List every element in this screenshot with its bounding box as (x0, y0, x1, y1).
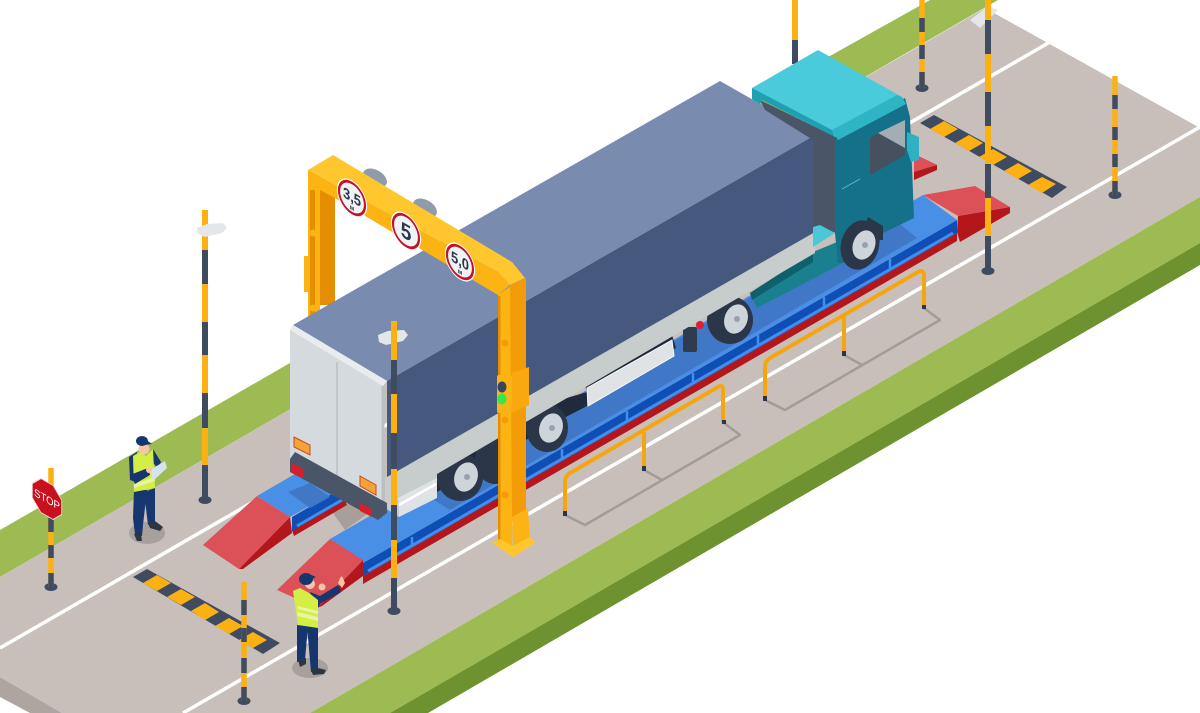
sign: height 3,5 m (337, 172, 367, 224)
worker with clipboard (129, 436, 167, 544)
trailer roof (293, 81, 815, 381)
cab roof (752, 50, 906, 140)
right leg (492, 278, 535, 557)
truck undercarriage (437, 321, 704, 492)
beam top face (308, 155, 525, 285)
trailer curtain side (387, 135, 815, 477)
pole: tall right (982, 0, 994, 275)
trailer rear doors (290, 325, 387, 505)
cab gap (760, 100, 837, 233)
sign: height 3,5 m: м (350, 204, 354, 213)
cab mirror (907, 132, 919, 162)
pole: far roadside (916, 0, 928, 92)
cab body (835, 98, 914, 263)
pole: tall left with camera (197, 210, 227, 504)
railing shadows (565, 308, 940, 525)
tractor chassis (750, 240, 845, 308)
trailer sill (385, 232, 815, 508)
gantry cameras (360, 165, 492, 250)
pole: far right (1108, 76, 1122, 199)
speed bump: near (133, 569, 280, 654)
sign: height 5,0 m: 5,0 (451, 248, 469, 275)
pole: near roadside (238, 582, 250, 705)
railing far (765, 271, 924, 401)
trailer bumper (290, 452, 387, 520)
weighbridge: front platform (277, 186, 1010, 608)
cab window (870, 120, 905, 175)
sign: weight 5 t: 5 (401, 216, 411, 247)
front grass verge (310, 197, 1200, 713)
camera head: top right (970, 6, 998, 28)
pole: tall centre with camera (378, 321, 408, 615)
rear grass strip (0, 0, 998, 577)
cab step (813, 225, 835, 247)
wheel arch (860, 217, 883, 240)
pole: behind truck (792, 0, 798, 64)
stop sign (32, 474, 62, 524)
speed bump: far (920, 115, 1067, 198)
beam front face (308, 170, 510, 295)
truck (290, 50, 919, 520)
sign: height 5,0 m: м (458, 268, 462, 277)
pole: stop sign pole (44, 468, 58, 591)
trailer under-run box (385, 478, 437, 517)
sign: height 3,5 m: 3,5 (343, 184, 361, 211)
wheel: trailer front (526, 404, 568, 452)
wheel: steering axle (835, 216, 885, 274)
cargo side skirt (587, 340, 674, 406)
gantry: left leg (304, 172, 335, 322)
wheel: trailer middle (475, 436, 515, 484)
stop sign: STOP (34, 487, 60, 513)
railing near (565, 386, 724, 516)
gantry: beam and right leg (308, 155, 535, 557)
sign: height 5,0 m (445, 236, 475, 288)
wheel: tractor rear (707, 296, 753, 344)
cab door line (842, 179, 860, 189)
sign: weight 5 t (391, 205, 421, 257)
wheel: trailer rear (437, 453, 483, 501)
weighbridge: rear platform (203, 154, 937, 569)
worker signalling (292, 573, 345, 678)
traffic light (497, 375, 512, 413)
